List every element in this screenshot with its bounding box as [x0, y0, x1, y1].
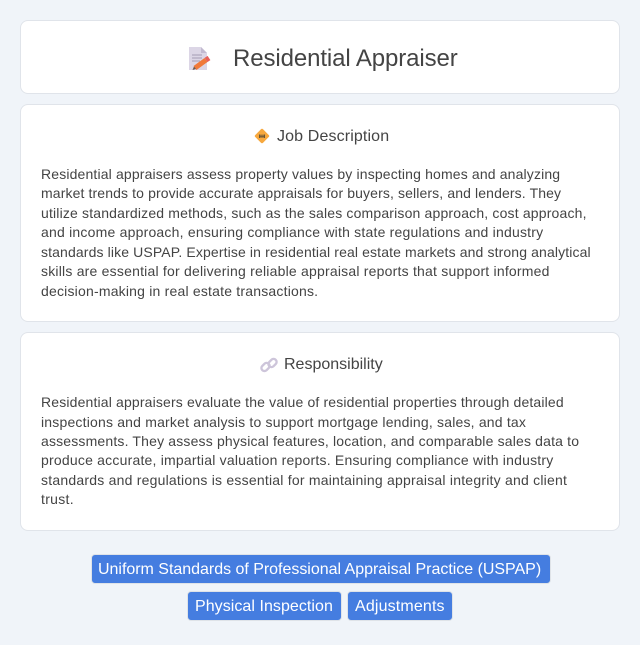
text: job description: skills are essential for delivering reliable appraisal reports that support informed — [41, 263, 550, 279]
text: job description — [41, 166, 591, 299]
text: responsibility: produce accurate, impartial valuation reports. Ensuring compliance with industry — [41, 452, 554, 468]
tag: physical inspection — [187, 591, 342, 621]
text: responsibility: standards and regulations is essential for maintaining appraisal integrity and client — [41, 472, 567, 488]
text: responsibility: trust. — [41, 491, 74, 507]
icon: document with pencil — [189, 47, 210, 70]
heading: responsibility: Responsibility — [284, 356, 383, 373]
text: job description: decision-making in real estate transactions. — [41, 283, 318, 299]
text: job description: Residential appraisers assess property values by inspecting homes and analyzing — [41, 166, 560, 182]
panel: header — [20, 20, 620, 94]
text: job description: and income approach, ensuring compliance with state regulations and industry — [41, 224, 543, 240]
text: responsibility — [41, 394, 579, 507]
text: job description: market trends to provide accurate appraisals for buyers, sellers, and lenders. They — [41, 185, 561, 201]
heading: job description: Job Description — [277, 128, 389, 145]
text: responsibility: inspections and market analysis to support mortgage lending, sales, and tax — [41, 414, 526, 430]
text: job description: standards like USPAP. Expertise in residential real estate markets and strong analytical — [41, 244, 591, 260]
text: job description: utilize standardized methods, such as the sales comparison approach, cost approach, — [41, 205, 587, 221]
icon: link — [260, 358, 278, 372]
panel: job description — [20, 104, 620, 322]
text: responsibility: assessments. They assess physical features, location, and comparable sales data to — [41, 433, 579, 449]
tag: USPAP: Uniform Standards of Professional Appraisal Practice (USPAP) — [98, 561, 541, 578]
tag: physical inspection: Physical Inspection — [195, 598, 333, 615]
tag: adjustments: Adjustments — [355, 598, 445, 615]
tag: USPAP — [91, 554, 551, 584]
text: responsibility: Residential appraisers evaluate the value of residential properties through detailed — [41, 394, 564, 410]
icon: job description diamond — [254, 128, 270, 144]
panel: responsibility — [20, 332, 620, 531]
tag: adjustments — [347, 591, 453, 621]
title: Residential Appraiser — [233, 45, 458, 72]
